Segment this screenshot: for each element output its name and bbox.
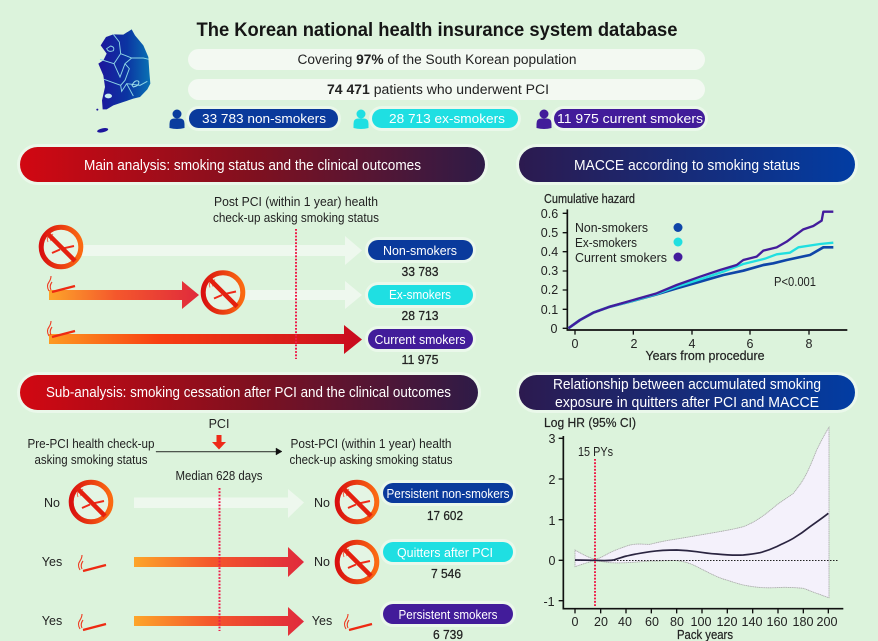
label: current smokers: 11 975	[402, 353, 439, 367]
banner: coverage: Covering 97% of the South Korean population	[298, 52, 576, 67]
axis tick labels: 0.5	[541, 226, 558, 240]
label: quitters	[383, 542, 513, 581]
group: current smokers count: 11 975 current smokers	[557, 112, 703, 126]
text: PCI: PCI	[209, 417, 229, 431]
icon: no smoking, row 2	[203, 273, 243, 312]
confidence band	[575, 427, 829, 598]
legend: Current smokers	[575, 251, 667, 265]
text: median interval: Median 628 days	[176, 469, 262, 483]
label: persistent smokers	[383, 604, 513, 641]
axis tick labels: 200	[816, 615, 838, 629]
text: post-PCI check-up: Post-PCI (within 1 year) health	[290, 437, 452, 451]
axes	[563, 209, 847, 335]
axis tick labels: 0.3	[541, 264, 558, 278]
axis tick labels	[541, 207, 813, 351]
heading: sub-analysis	[20, 375, 478, 410]
data curves	[568, 212, 833, 328]
p-value: P<0.001	[774, 275, 816, 289]
text: pre-PCI check-up: Pre-PCI health check-up	[28, 437, 155, 451]
label: persistent non-smokers: 17 602	[427, 509, 463, 523]
panel: main analysis diagram	[41, 195, 473, 367]
arrow: current smokers	[49, 325, 362, 354]
zero line	[575, 560, 838, 562]
heading: MACCE chart: MACCE according to smoking status	[574, 157, 800, 174]
text: post-PCI check-up: check-up asking smoking status	[290, 453, 452, 467]
legend	[575, 221, 682, 265]
row: persistent non-smokers: No	[314, 496, 330, 510]
axis tick labels: 2	[631, 337, 638, 351]
timeline arrow	[156, 448, 282, 455]
group: non-smokers count	[170, 109, 338, 129]
icon: cigarette, row 2	[48, 276, 75, 292]
axis tick labels: 0.4	[541, 245, 558, 259]
icon: map of South Korea	[96, 29, 150, 133]
axis tick labels: 0	[572, 337, 579, 351]
group: ex-smokers count	[354, 109, 518, 129]
icon: cigarette, row 3	[48, 321, 75, 337]
row: persistent smokers: Yes	[42, 614, 62, 628]
axis tick labels: 2	[549, 473, 556, 487]
axis tick labels: 100	[690, 615, 712, 629]
label: quitters: Quitters after PCI	[397, 546, 493, 560]
15 PY marker: 15 PYs	[578, 445, 613, 459]
axis tick labels: 0.6	[541, 207, 558, 221]
heading: sub-analysis: Sub-analysis: smoking cessation after PCI and the clinical outcomes	[46, 384, 451, 401]
axis title: years: Years from procedure	[646, 349, 765, 363]
label: non-smokers	[368, 240, 473, 279]
axis tick labels: 0	[549, 554, 556, 568]
arrow: ex-smoker after cessation	[245, 281, 362, 309]
label: ex-smokers: Ex-smokers	[389, 288, 451, 302]
arrow: non-smokers	[80, 236, 362, 265]
axis tick labels: 20	[594, 615, 608, 629]
label: ex-smokers	[368, 285, 473, 323]
icon: no smoking, row 1	[41, 227, 81, 267]
time marker	[295, 229, 297, 359]
axis tick labels: 40	[618, 615, 632, 629]
banner: patient count	[188, 79, 705, 100]
axis tick labels: 80	[670, 615, 684, 629]
text: post PCI check-up: Post PCI (within 1 year) health	[214, 195, 378, 209]
banner: patient count: 74 471 patients who underwent PCI	[327, 82, 549, 97]
text: pre-PCI check-up: asking smoking status	[34, 453, 148, 467]
row: persistent smokers: Yes	[312, 614, 332, 628]
label: persistent non-smokers	[383, 483, 513, 523]
chart: cumulative hazard: Cumulative hazard	[544, 192, 635, 206]
axis tick labels: 3	[549, 432, 556, 446]
row: persistent non-smokers	[44, 482, 377, 522]
axis tick labels: 8	[806, 337, 813, 351]
axis tick labels: 180	[792, 615, 814, 629]
label: ex-smokers: 28 713	[402, 309, 439, 323]
banner: coverage	[188, 49, 705, 70]
group: non-smokers count: 33 783 non-smokers	[202, 112, 326, 126]
row: quitters: No	[314, 555, 330, 569]
chart: cumulative hazard	[541, 192, 847, 363]
axis tick labels: 0	[551, 322, 558, 336]
arrow: smoker until cessation	[49, 281, 199, 309]
label: persistent smokers: Persistent smokers	[398, 608, 498, 622]
heading: pack years chart: Relationship between accumulated smoking	[553, 376, 821, 393]
axis tick labels: 120	[716, 615, 738, 629]
axis tick labels: -1	[543, 595, 555, 609]
chart: log HR: Log HR (95% CI)	[544, 416, 636, 430]
legend: Non-smokers	[575, 221, 648, 235]
label: current smokers	[368, 329, 473, 367]
title: The Korean national health insurance system database	[196, 20, 678, 41]
axis tick labels: 1	[549, 514, 556, 528]
label: quitters: 7 546	[431, 567, 461, 581]
axis tick labels: 0.2	[541, 283, 558, 297]
row: quitters: Yes	[42, 555, 62, 569]
heading: main analysis: Main analysis: smoking status and the clinical outcomes	[84, 157, 421, 174]
time marker	[218, 488, 220, 631]
axis tick labels: 140	[742, 615, 763, 629]
axes	[559, 436, 843, 613]
row: persistent non-smokers: No	[44, 496, 60, 510]
axis tick labels: 60	[645, 615, 659, 629]
row: persistent smokers	[42, 607, 372, 636]
arrow: PCI marker	[212, 435, 226, 450]
axis tick labels: 0	[572, 615, 579, 629]
fitted curve	[575, 513, 828, 561]
legend: Ex-smokers	[575, 236, 637, 250]
row: quitters	[42, 542, 377, 582]
group: current smokers count	[536, 109, 705, 129]
heading: pack years chart	[519, 375, 855, 411]
label: non-smokers: Non-smokers	[383, 244, 457, 258]
axis tick labels: 160	[766, 615, 788, 629]
heading: pack years chart: exposure in quitters after PCI and MACCE	[555, 394, 819, 411]
heading: MACCE chart	[519, 147, 855, 182]
label: non-smokers: 33 783	[402, 265, 439, 279]
label: current smokers: Current smokers	[374, 333, 466, 347]
text: post PCI check-up: check-up asking smoking status	[213, 211, 379, 225]
axis tick labels: 0.1	[541, 303, 558, 317]
heading: main analysis	[20, 147, 485, 182]
axis tick labels: 6	[747, 337, 754, 351]
panel: sub-analysis diagram	[28, 417, 513, 641]
group: ex-smokers count: 28 713 ex-smokers	[389, 112, 505, 126]
axis tick labels	[543, 432, 838, 629]
axis tick labels: 4	[689, 337, 696, 351]
chart: log HR	[543, 416, 843, 641]
label: persistent non-smokers: Persistent non-smokers	[386, 487, 510, 501]
